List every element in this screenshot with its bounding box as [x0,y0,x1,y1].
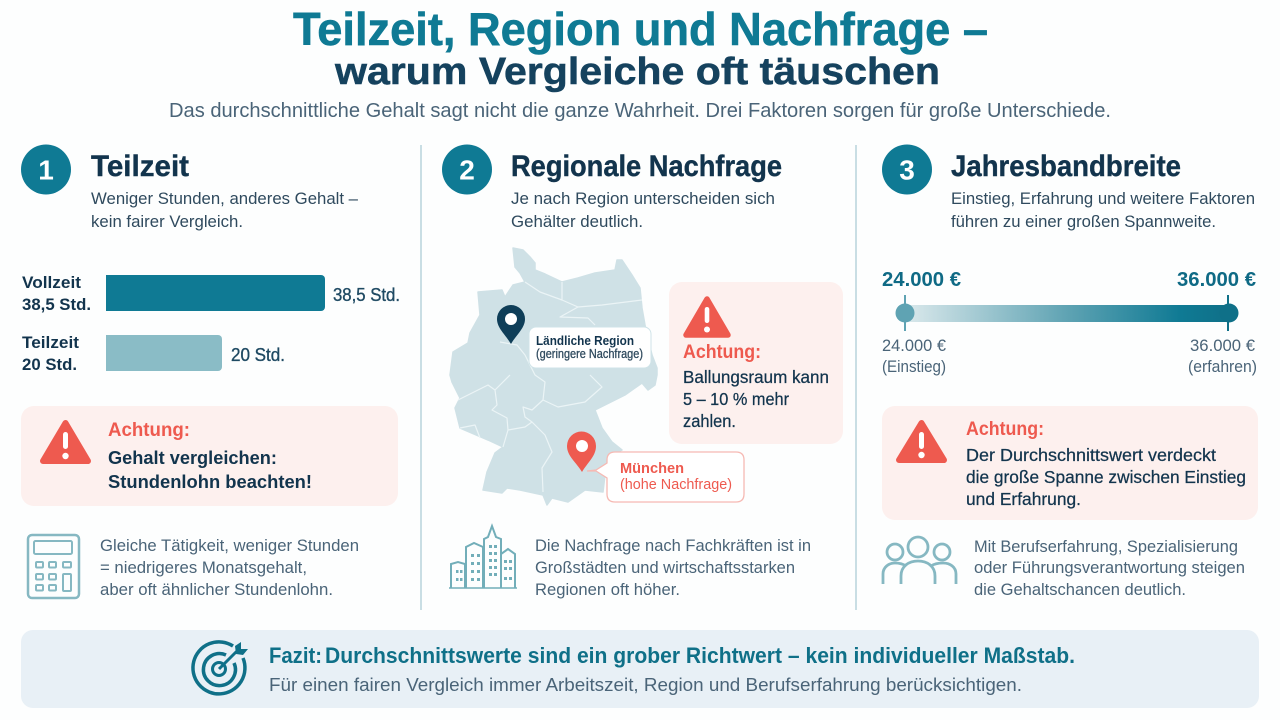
icon: calculator [28,535,79,598]
description: Einstieg, Erfahrung und weitere Faktoren [951,189,1255,208]
text: Nachfrage explanation: Regionen oft höher. [535,580,680,599]
title: warum Vergleiche oft täuschen [334,51,940,93]
subtitle: Das durchschnittliche Gehalt sagt nicht die ganze Wahrheit. Drei Faktoren sorgen für große Unterschiede. [169,99,1111,122]
text: Fazit headline: Durchschnittswerte sind ein grober Richtwert – kein individueller Maßstab. [325,643,1075,668]
number badge 2 [442,144,492,194]
bar: Teilzeit: 20 Std. [231,345,285,365]
bar chart: Arbeitsstunden [22,273,400,374]
text: Erfahrung explanation: Mit Berufserfahrung, Spezialisierung [974,537,1238,556]
callout: Achtung Ballungsraum: Achtung: [683,342,761,363]
chart: salary range: (erfahren) [1188,357,1257,376]
text: Erfahrung explanation [974,537,1245,599]
text: Nachfrage explanation [535,536,811,599]
map: Deutschland [450,248,657,505]
icon: warning triangle [43,423,88,461]
icon: target with arrow [193,642,248,694]
callout: München: (hohe Nachfrage) [620,477,732,493]
text: Nachfrage explanation: Die Nachfrage nach Fachkräften ist in [535,536,811,555]
icon: city buildings [449,526,517,588]
bar: Teilzeit: 20 Std. [22,355,77,374]
bar: Vollzeit: 38,5 Std. [333,285,400,305]
text: Stundenlohn explanation: = niedrigeres Monatsgehalt, [100,558,307,577]
callout: Achtung Stundenlohn [21,406,398,506]
heading: Regionale Nachfrage: Regionale Nachfrage [511,150,782,183]
callout: München: München [620,460,684,477]
chart: salary range: 24.000 € [882,336,947,355]
title [293,3,988,93]
panel: Teilzeit [21,144,400,599]
heading: Teilzeit: Teilzeit [91,150,189,183]
panel: Fazit [21,630,1259,708]
callout: Achtung Durchschnittswert: die große Spanne zwischen Einstieg [966,467,1246,487]
text: Stundenlohn explanation: Gleiche Tätigkeit, weniger Stunden [100,536,359,555]
callout: Achtung Durchschnittswert: und Erfahrung. [966,489,1081,509]
callout: Achtung Ballungsraum [669,282,843,444]
bar: Vollzeit [22,273,400,314]
icon: dark pin [497,305,525,344]
callout: München [567,432,744,502]
panel: Regionale Nachfrage [442,144,843,599]
icon: warning triangle [686,299,728,335]
description: führen zu einer großen Spannweite. [951,212,1216,231]
title: Teilzeit, Region und Nachfrage – [293,3,988,55]
callout: Ländliche Region: Ländliche Region [536,333,634,348]
callout: Achtung Durchschnittswert: Der Durchschnittswert verdeckt [966,445,1216,465]
chart: salary range [882,269,1257,376]
callout: Achtung Stundenlohn: Achtung: [108,420,190,441]
number badge 1 [21,144,71,194]
chart: salary range: (Einstieg) [882,357,946,376]
callout: Achtung Durchschnittswert: Achtung: [966,419,1044,440]
description: Je nach Region unterscheiden sich [511,189,775,208]
panel: Jahresbandbreite [882,144,1258,599]
callout: Ländliche Region [497,305,651,368]
number badge 1: 1 [38,154,54,186]
description: Gehälter deutlich. [511,212,643,231]
text: Stundenlohn explanation: aber oft ähnlicher Stundenlohn. [100,580,333,599]
number badge 2: 2 [459,154,475,186]
bar: Teilzeit: Teilzeit [22,333,79,352]
heading: Jahresbandbreite: Jahresbandbreite [951,150,1181,183]
callout: Achtung Ballungsraum: 5 – 10 % mehr [683,389,789,409]
callout: Ländliche Region: (geringere Nachfrage) [536,347,643,361]
callout: Achtung Durchschnittswert [882,406,1258,520]
icon: people [883,537,956,584]
text: Erfahrung explanation: oder Führungsverantwortung steigen [974,558,1245,577]
description: Weniger Stunden, anderes Gehalt – [91,189,359,208]
number badge 3 [882,144,932,194]
callout: Achtung Ballungsraum: Ballungsraum kann [683,367,829,387]
chart: salary range: 36.000 € [1190,336,1256,355]
text: Erfahrung explanation: die Gehaltschancen deutlich. [974,580,1186,599]
description: kein fairer Vergleich. [91,212,243,231]
description [511,189,775,231]
chart: salary range: 36.000 € [1177,269,1256,291]
text: Fazit headline: Fazit: [269,643,322,668]
text: Nachfrage explanation: Großstädten und wirtschaftsstarken [535,558,795,577]
callout: Achtung Stundenlohn: Gehalt vergleichen: [108,448,277,468]
bar: Vollzeit: 38,5 Std. [22,295,91,314]
icon: red pin [567,432,596,472]
bar: Vollzeit: Vollzeit [22,273,81,292]
icon: warning triangle [899,423,944,460]
description [951,189,1255,231]
bar: Teilzeit [22,333,285,374]
callout: Achtung Ballungsraum: zahlen. [683,411,736,431]
chart: salary range: 24.000 € [882,269,961,291]
description [91,189,359,231]
callout: Achtung Stundenlohn: Stundenlohn beachten! [108,472,312,492]
number badge 3: 3 [899,154,915,186]
text: Stundenlohn explanation [100,536,359,599]
text: Fazit note: Für einen fairen Vergleich immer Arbeitszeit, Region und Berufserfahrung berücksichtigen. [269,674,1022,695]
